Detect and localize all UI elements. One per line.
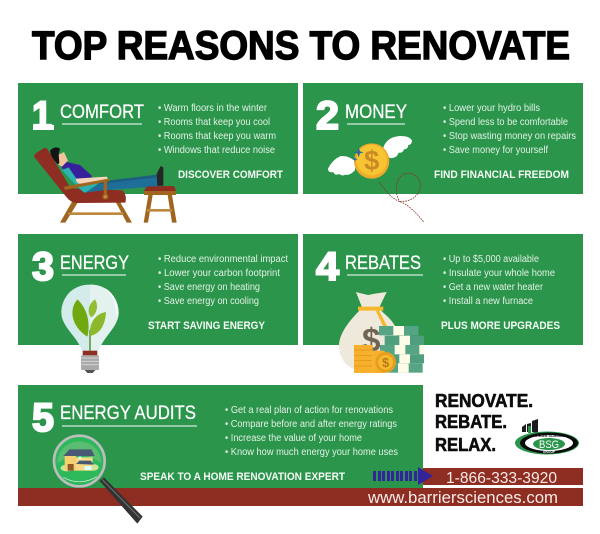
rebates bullet list: [443, 254, 555, 307]
slogan: RENOVATE.: [435, 391, 533, 411]
rebates bullet list: • Insulate your whole home: [443, 268, 555, 279]
comfort bullet list: • Windows that reduce noise: [158, 145, 275, 156]
heading: energy audits: ENERGY AUDITS: [60, 403, 196, 424]
call to action: speak to an expert: SPEAK TO A HOME RENOVATION EXPERT: [140, 471, 345, 483]
number 3: 3: [32, 245, 54, 289]
panel: rebates: [303, 234, 583, 373]
comfort bullet list: • Rooms that keep you cool: [158, 117, 270, 128]
energy audits bullet list: • Increase the value of your home: [225, 433, 362, 444]
panel: money: [303, 83, 583, 222]
call to action: discover comfort: DISCOVER COMFORT: [178, 169, 283, 181]
footer bar: [18, 488, 583, 506]
phone band: 1-866-333-3920: [446, 470, 557, 487]
money bullet list: • Lower your hydro bills: [443, 103, 540, 114]
energy audits bullet list: • Know how much energy your home uses: [225, 447, 398, 458]
arrow pointing to phone number: [373, 467, 433, 485]
icon: winged gold coin with dashed flight trail: $: [364, 145, 379, 176]
phone band: [423, 468, 583, 487]
comfort bullet list: • Rooms that keep you warm: [158, 131, 276, 142]
logo: BSG Barrier Sciences Group: [515, 419, 579, 454]
number 4: 4: [316, 245, 340, 289]
panel: energy: [18, 234, 298, 373]
call to action: find financial freedom: FIND FINANCIAL FREEDOM: [434, 169, 569, 181]
energy audits bullet list: • Compare before and after energy ratings: [225, 419, 397, 430]
panel: comfort: [18, 83, 298, 223]
icon: man relaxing in a recliner with footstool: [34, 147, 177, 223]
energy bullet list: • Lower your carbon footprint: [158, 268, 280, 279]
heading: energy: ENERGY: [60, 253, 129, 274]
icon: money bag with coins and banknotes: [339, 292, 424, 373]
title: TOP REASONS TO RENOVATE: [32, 24, 570, 68]
rebates bullet list: • Install a new furnace: [443, 296, 533, 307]
logo: BSG Barrier Sciences Group: BARRIER SCIENCES: [531, 434, 568, 438]
panel: energy audits: [18, 385, 583, 524]
icon: magnifying glass over a house: [54, 436, 143, 524]
money bullet list: [443, 103, 576, 156]
money bullet list: • Save money for yourself: [443, 145, 548, 156]
energy bullet list: • Reduce environmental impact: [158, 254, 288, 265]
slogan: [435, 391, 533, 455]
comfort bullet list: • Warm floors in the winter: [158, 103, 268, 114]
icon: money bag with coins and banknotes: $: [382, 356, 389, 370]
number 5: 5: [32, 396, 54, 440]
energy audits bullet list: [225, 405, 398, 458]
comfort bullet list: [158, 103, 276, 156]
heading: comfort: COMFORT: [60, 102, 144, 123]
icon: money bag with coins and banknotes: $: [362, 322, 381, 359]
slogan: REBATE.: [435, 412, 507, 432]
heading: rebates: REBATES: [345, 253, 421, 274]
icon: winged gold coin with dashed flight trail: [328, 136, 424, 222]
call to action: start saving energy: START SAVING ENERGY: [148, 320, 266, 332]
number 1: 1: [32, 94, 52, 138]
rebates bullet list: • Up to $5,000 available: [443, 254, 539, 265]
slogan: RELAX.: [435, 435, 496, 455]
website address: www.barriersciences.com: [367, 489, 558, 507]
logo: BSG Barrier Sciences Group: GROUP: [543, 450, 556, 454]
icon: light bulb with green leaves: [61, 285, 119, 373]
energy bullet list: • Save energy on cooling: [158, 296, 259, 307]
money bullet list: • Stop wasting money on repairs: [443, 131, 576, 142]
energy audits bullet list: • Get a real plan of action for renovations: [225, 405, 393, 416]
energy bullet list: [158, 254, 288, 307]
energy bullet list: • Save energy on heating: [158, 282, 260, 293]
money bullet list: • Spend less to be comfortable: [443, 117, 568, 128]
heading: money: MONEY: [345, 102, 407, 123]
logo: BSG Barrier Sciences Group: BSG: [539, 439, 559, 451]
number 2: 2: [316, 94, 339, 138]
call to action: plus more upgrades: PLUS MORE UPGRADES: [441, 320, 560, 332]
rebates bullet list: • Get a new water heater: [443, 282, 544, 293]
